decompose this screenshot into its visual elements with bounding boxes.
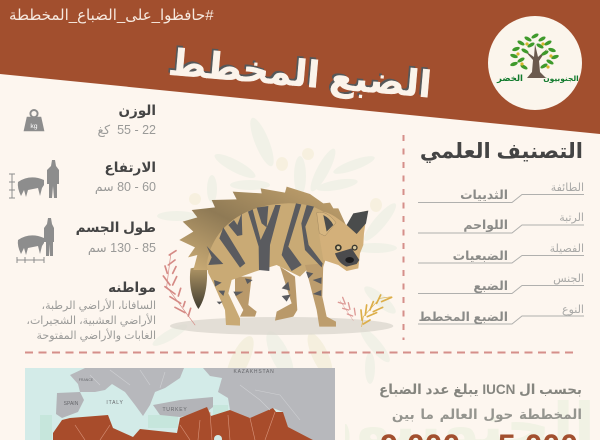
map: distribution: ITALY [106, 400, 124, 406]
far rear leg [235, 277, 257, 317]
face [335, 248, 359, 267]
icon: weight: kg [30, 123, 38, 130]
text block: population [379, 382, 582, 440]
body [207, 203, 337, 326]
icon: length comparison [16, 218, 54, 263]
panel: classification table: الضبع [473, 279, 508, 293]
logo: الخضر [496, 73, 523, 84]
map: distribution [25, 368, 335, 440]
panel: classification table: الطائفة [551, 182, 584, 194]
habitat text: الغابات والأراضي المفتوحة [36, 330, 156, 342]
panel: classification table: الثدييات [460, 188, 508, 202]
panel: body length [16, 218, 156, 263]
habitat text [26, 298, 156, 342]
height heading: الارتفاع [104, 160, 156, 175]
population line 2: المخططة حول العالم ما بين [392, 407, 582, 422]
far front leg [275, 267, 297, 321]
head [317, 211, 367, 271]
icon: height comparison [9, 160, 59, 198]
habitat text: السافانا، الأراضي الرطبة، [42, 300, 156, 312]
population line 1: بحسب ال IUCN يبلغ عدد الضباع [379, 382, 582, 397]
ear [347, 211, 368, 234]
habitat heading: مواطنه [108, 280, 156, 295]
mane [179, 187, 347, 270]
heading: scientific classification: التصنيف العلمي [420, 140, 583, 163]
plant: left red branch [163, 251, 195, 325]
near front leg [305, 263, 336, 327]
body length heading: طول الجسم [76, 220, 156, 235]
icon: weight [24, 109, 44, 132]
panel: classification table: اللواحم [463, 218, 508, 232]
hashtag: #حافظوا_على_الضباع_المخططة [9, 7, 214, 24]
panel: habitat [26, 280, 156, 342]
height value: 60 - 80 سم [95, 180, 156, 194]
plant: small red branch [338, 297, 355, 321]
panel: classification table: النوع [562, 304, 584, 316]
panel: height [9, 160, 156, 198]
habitat text: الأراضي العشبية، الشجيرات، [26, 315, 156, 327]
plant: gold branch [361, 295, 392, 327]
body length value: 85 - 130 سم [88, 241, 156, 255]
panel: classification table: الجنس [553, 273, 584, 285]
logo: الجنوبيون [543, 74, 579, 83]
panel: weight [24, 103, 156, 137]
stripes [207, 203, 323, 304]
panel: classification table: الضبعيات [453, 249, 508, 263]
panel: classification table: الرتبة [559, 212, 584, 224]
map: distribution: SPAIN [64, 401, 79, 407]
map: distribution: KAZAKHSTAN [234, 369, 274, 375]
panel: classification table: الفصيلة [550, 243, 584, 255]
title: الضبع المخطط [167, 42, 433, 105]
weight heading: الوزن [119, 103, 156, 118]
panel: classification table: الضبع المخطط [418, 310, 508, 324]
weight value: 22 - 55 كغ [98, 123, 156, 137]
map: distribution: FRANCE [79, 378, 94, 382]
map: distribution: TURKEY [162, 407, 188, 413]
